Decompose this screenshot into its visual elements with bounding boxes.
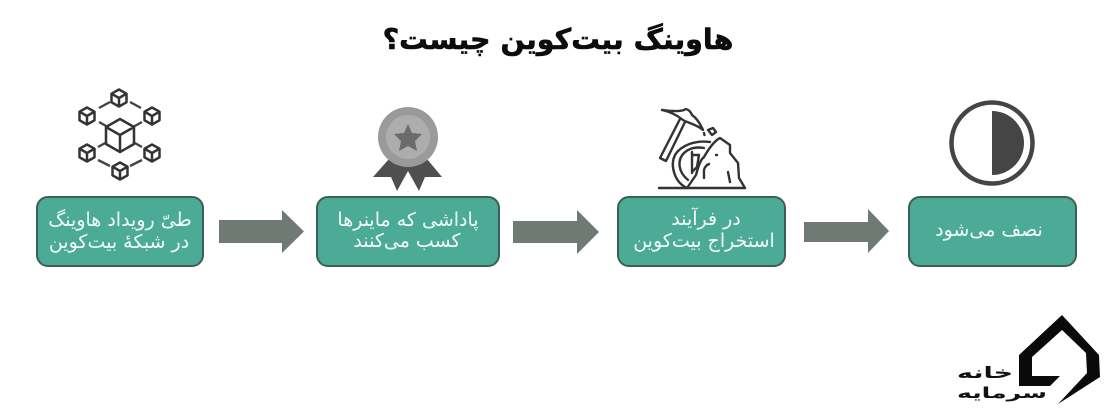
step box 3 bbox=[618, 197, 785, 266]
arrow 2 bbox=[513, 210, 599, 254]
logo: Khane Sarmayeh bbox=[957, 315, 1100, 404]
logo mark bbox=[1019, 315, 1100, 404]
arrow 1 bbox=[219, 210, 304, 253]
step box 4: نصف می‌شود bbox=[935, 219, 1043, 241]
logo wordmark: سرمایه bbox=[957, 384, 1047, 402]
logo wordmark bbox=[957, 363, 1047, 402]
step box 1: در شبکۀ بیت‌کوین bbox=[49, 231, 189, 253]
step box 1: طیّ رویداد هاوینگ bbox=[48, 209, 192, 231]
step box 1 bbox=[37, 197, 203, 266]
step box 2 bbox=[317, 197, 499, 266]
logo wordmark: خانه bbox=[957, 363, 1013, 382]
icon: mining pick and bitcoin mountain bbox=[659, 109, 745, 188]
step box 2: کسب می‌کنند bbox=[353, 230, 462, 252]
step box 4 bbox=[909, 197, 1076, 266]
title: هاوینگ بیت‌کوین چیست؟ bbox=[383, 23, 733, 56]
step box 2: پاداشی که ماینرها bbox=[337, 209, 479, 231]
arrow 3 bbox=[804, 209, 889, 253]
step box 3: استخراج بیت‌کوین bbox=[633, 230, 775, 252]
icon: half circle bbox=[952, 102, 1032, 184]
icon: medal bbox=[373, 107, 442, 191]
icon: blockchain network bbox=[80, 90, 160, 180]
step box 3: در فرآیند bbox=[671, 206, 741, 230]
